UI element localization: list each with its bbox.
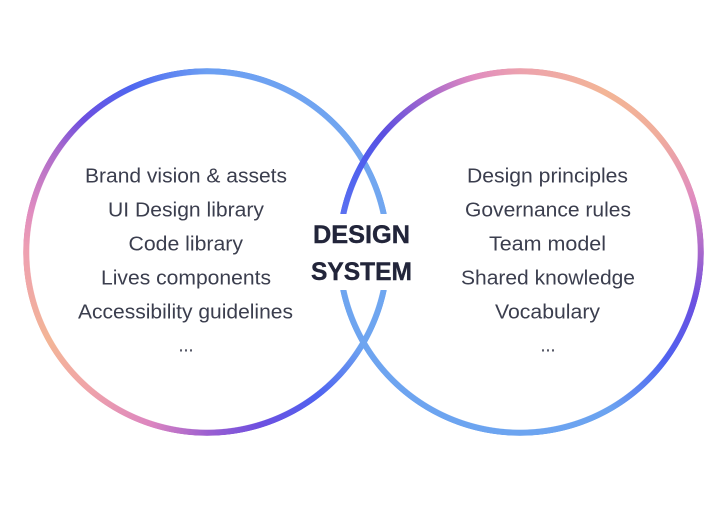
central title	[311, 221, 412, 286]
left circle list: UI Design library	[108, 198, 265, 222]
right circle list: Shared knowledge	[461, 266, 635, 290]
right circle: gradient ring	[336, 68, 704, 436]
right circle list: Team model	[489, 232, 606, 256]
right circle list: Vocabulary	[495, 300, 601, 324]
left circle list	[78, 164, 293, 356]
central title: DESIGN	[313, 221, 410, 249]
right circle list: ...	[540, 334, 556, 356]
left circle list: Code library	[128, 232, 244, 256]
left circle list: Brand vision & assets	[85, 164, 287, 188]
right circle list	[461, 164, 635, 356]
right circle list: Design principles	[467, 164, 628, 188]
left circle list: ...	[178, 334, 194, 356]
white gap behind the central title	[325, 214, 405, 290]
left circle list: Lives components	[101, 266, 271, 290]
left circle: gradient ring	[23, 68, 391, 436]
central title: SYSTEM	[311, 258, 412, 286]
left circle list: Accessibility guidelines	[78, 300, 293, 324]
right circle list: Governance rules	[465, 198, 631, 222]
